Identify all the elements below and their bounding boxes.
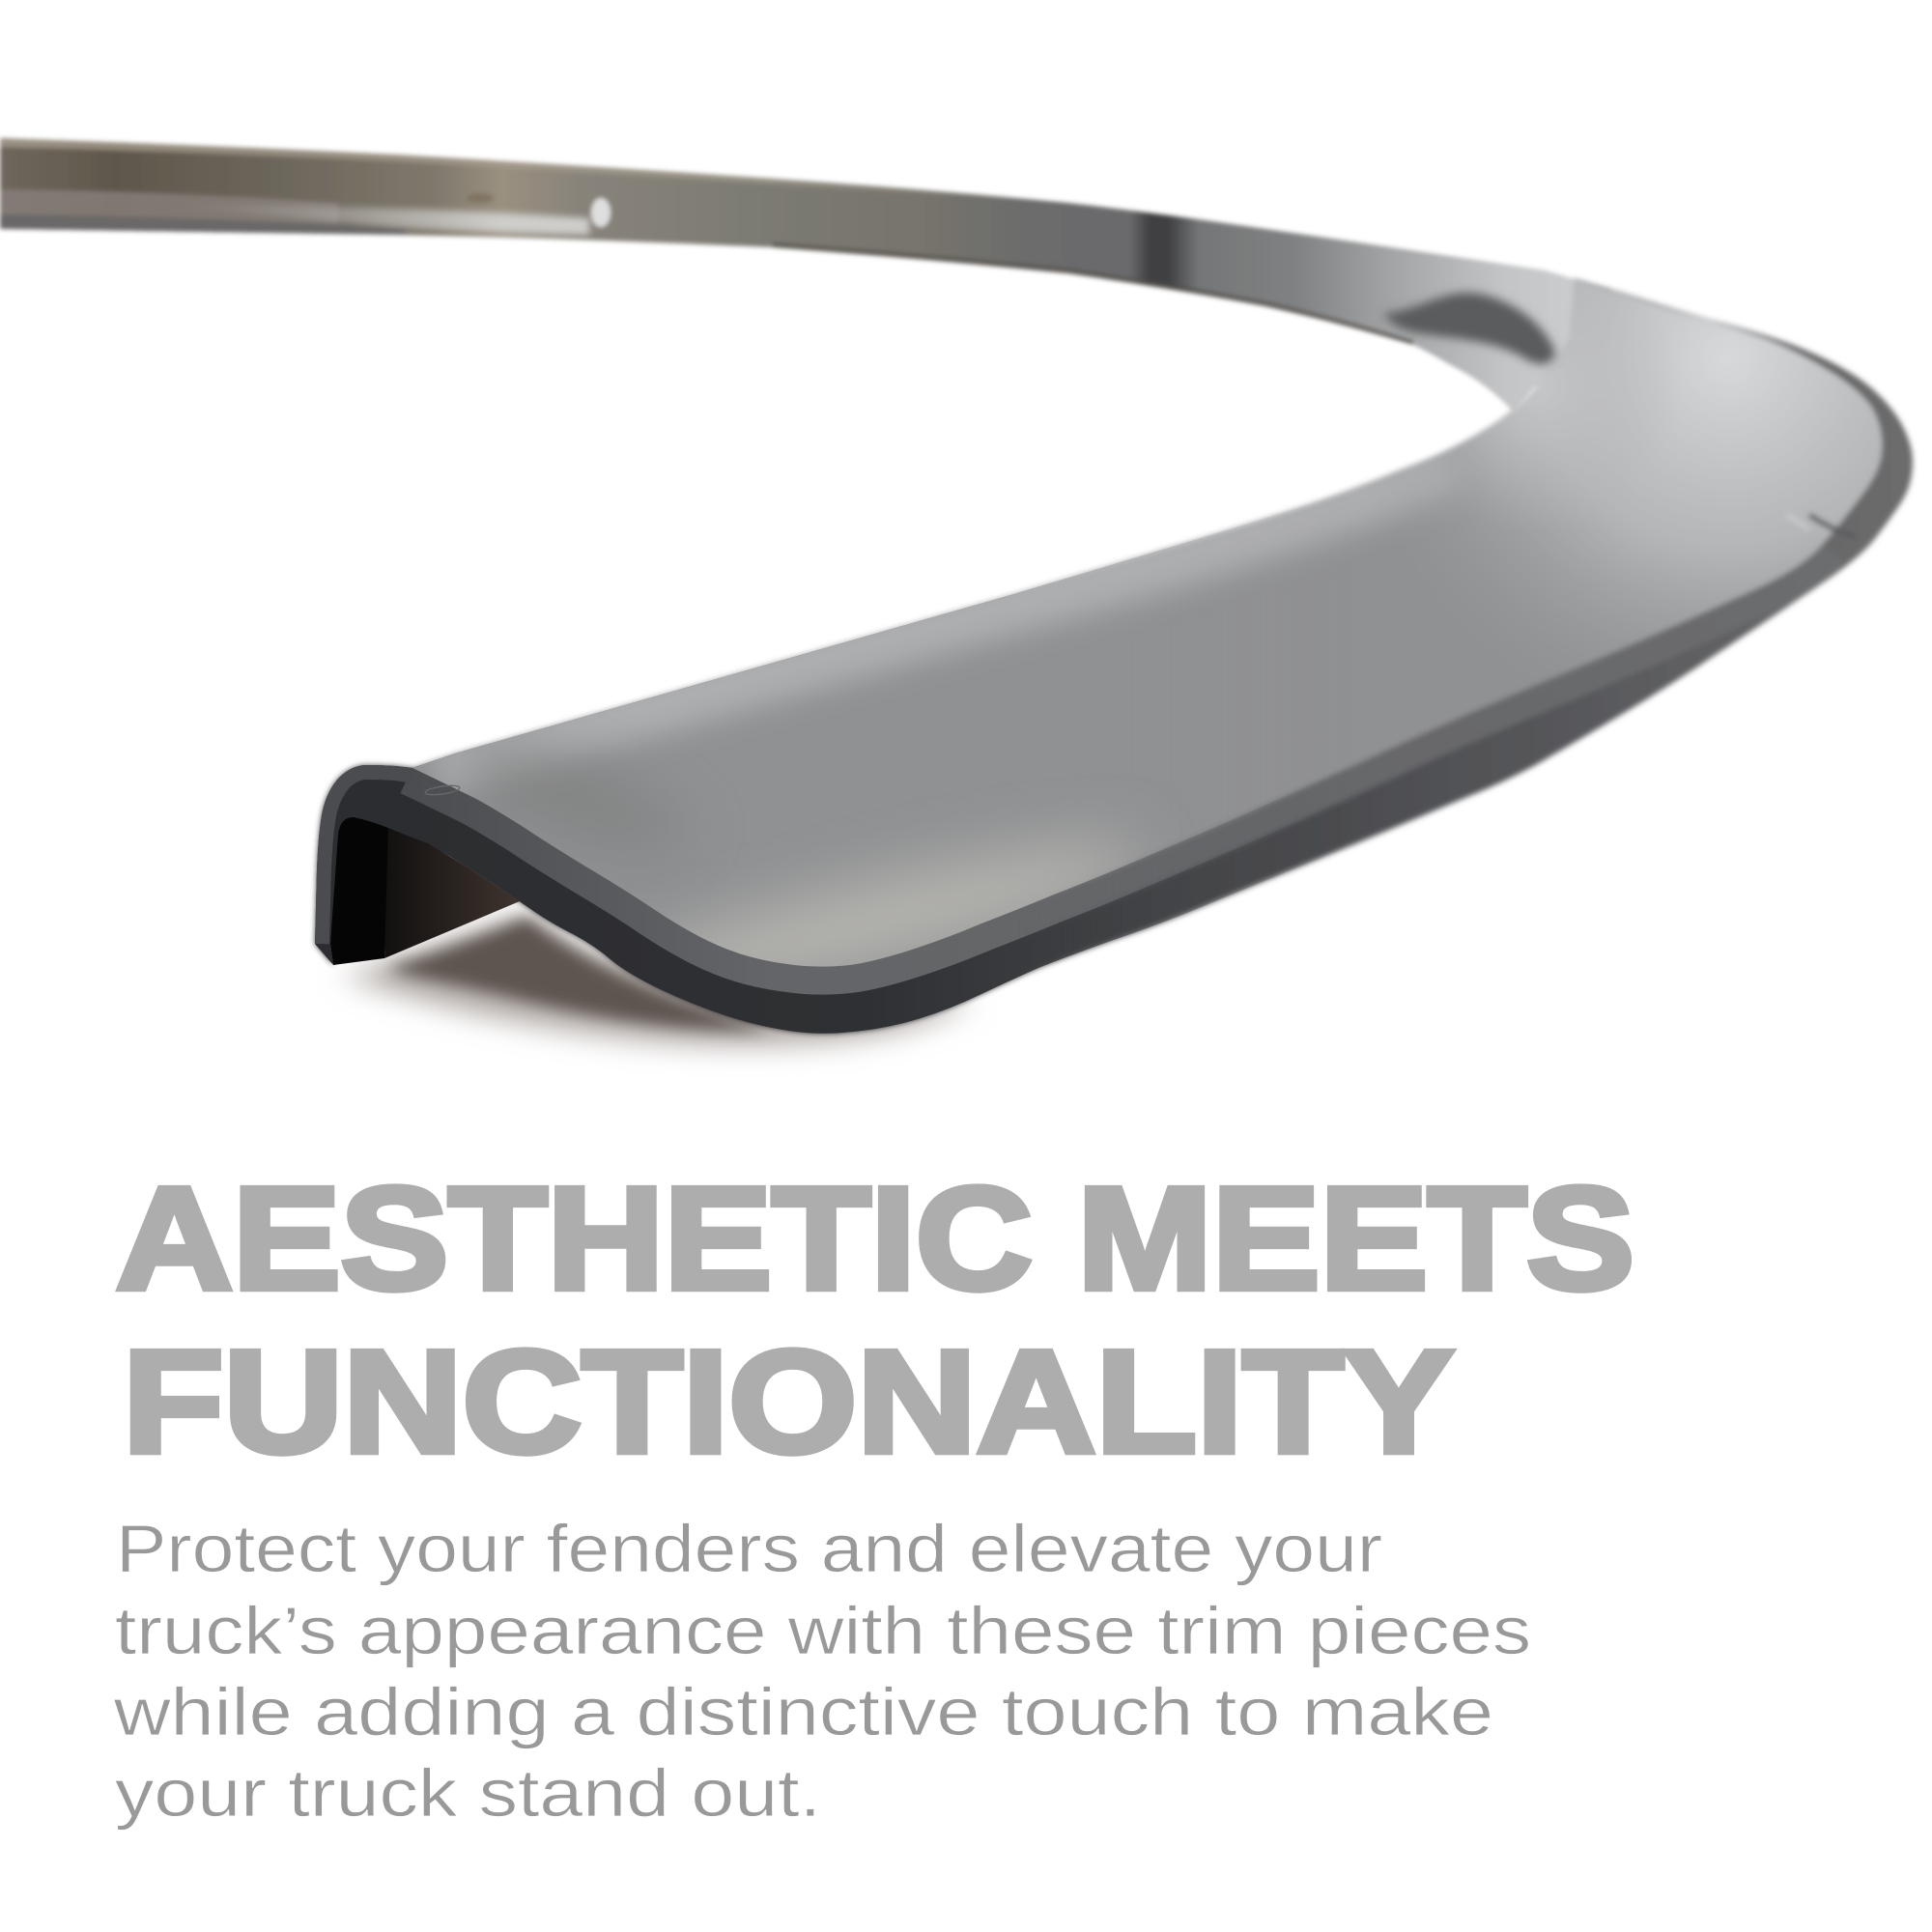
heading line 2: FUNCTIONALITY: [123, 1320, 1454, 1483]
body line 2: truck’s appearance with these trim pieces: [115, 1593, 1531, 1668]
trim body, soft-focus layer: [290, 261, 1932, 1053]
dark rubber edge band: [290, 261, 1932, 1053]
flange lower dark line: [773, 242, 1413, 345]
body line 3: while adding a distinctive touch to make: [113, 1674, 1493, 1749]
flange rust spot: [467, 193, 494, 203]
heading line 1: AESTHETIC MEETS: [116, 1156, 1634, 1320]
seam dark crease: [1809, 515, 1857, 537]
underside brown surface: [384, 828, 520, 958]
seam highlight: [1787, 515, 1809, 529]
front end dark interior: [330, 817, 520, 965]
panel upper sheen along inner edge: [435, 464, 1449, 768]
body copy: [113, 1511, 1531, 1831]
panel bright bend, right: [1463, 278, 1886, 645]
flange bright streak before hole: [174, 205, 589, 235]
ground shadow under trim: [340, 913, 976, 1045]
main curved panel: [412, 276, 1886, 967]
flange soft top highlight: [0, 138, 1063, 203]
panel dark zone near lip: [449, 730, 657, 844]
panel warm lower highlight: [672, 825, 1139, 967]
flange lower grey edge: [0, 214, 406, 235]
panel light at inner tip: [1457, 363, 1567, 479]
heading: [116, 1156, 1634, 1483]
lighter band stripe along lower edge: [412, 544, 1823, 967]
body line 1: Protect your fenders and elevate your: [116, 1511, 1382, 1586]
trim body, in-focus near end: [315, 506, 1320, 1034]
arch outer stripe: [315, 765, 415, 944]
mounting hole: [591, 198, 611, 227]
chrome flange strip: [0, 138, 1623, 425]
product photo: fender trim piece: [0, 138, 1932, 1053]
flange mid grey streak, left: [0, 189, 338, 224]
maker mark on lip: [425, 784, 460, 796]
body line 4: your truck stand out.: [115, 1755, 821, 1831]
flange reflection near bend: [1383, 293, 1555, 364]
